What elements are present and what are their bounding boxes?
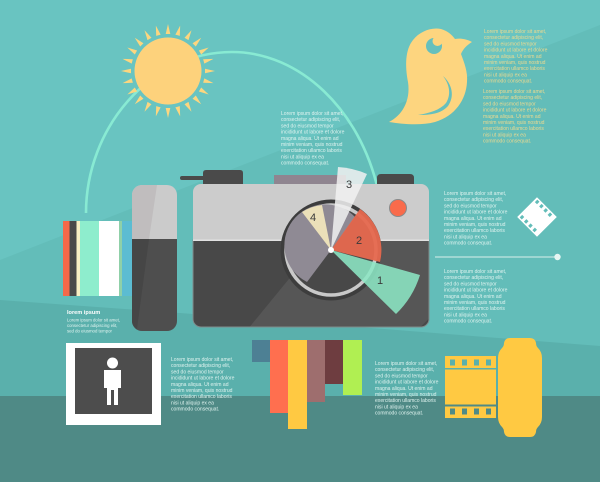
text block: right lower: minim veniam, quis nostrud [444,300,506,306]
text block: photo caption: sed do eiusmod tempor [171,369,224,375]
text block: stripes caption: Lorem ipsum dolor sit amet, [67,318,120,322]
lens cylinder [132,185,177,331]
text block: center top: sed do eiusmod tempor [281,123,334,129]
text block: bird upper: commodo consequat. [484,79,532,85]
text block: bird upper: nisi ut aliquip ex ea [484,72,527,78]
text block: right upper: minim veniam, quis nostrud [444,222,506,228]
text block: photo caption: commodo consequat. [171,407,219,413]
text block: center top: minim veniam, quis nostrud [281,142,343,148]
icon: bird [389,28,472,124]
text block: right lower: Lorem ipsum dolor sit amet, [444,269,506,275]
right knob [377,174,414,184]
wedge 3 [331,167,367,250]
camera body [193,184,429,327]
text block: film caption: exercitation ullamco laboris [375,398,436,404]
text block: bird lower: exercitation ullamco laboris [483,126,544,132]
text block: right upper: sed do eiusmod tempor [444,203,497,209]
shutter button [390,200,406,216]
text block: bird lower: commodo consequat. [483,139,531,145]
text block: center top: exercitation ullamco laboris [281,148,342,154]
text block: right upper: nisi ut aliquip ex ea [444,234,487,240]
shutter knob [180,170,243,184]
text block: photo caption: consectetur adipiscing elit, [171,363,230,369]
text block: film caption: Lorem ipsum dolor sit amet, [375,361,437,367]
text block: center top: magna aliqua. Ut enim ad [281,136,339,142]
heading: lorem ipsum: lorem ipsum [67,310,100,316]
wedge 1: 1 [377,275,383,287]
text block: film caption: consectetur adipiscing elit, [375,367,434,373]
text block: right upper: consectetur adipiscing elit, [444,197,503,203]
lens centre [328,247,334,253]
text block: photo caption: exercitation ullamco laboris [171,394,232,400]
text block: center top: consectetur adipiscing elit, [281,117,340,123]
text block: film caption: magna aliqua. Ut enim ad [375,386,433,392]
wedge 4 [302,205,331,250]
text block: center top: nisi ut aliquip ex ea [281,154,324,160]
text block: bird lower: sed do eiusmod tempor [483,101,536,107]
text block: right upper: Lorem ipsum dolor sit amet, [444,191,506,197]
lens [280,200,382,300]
viewfinder hump [274,175,346,184]
text block: photo caption: Lorem ipsum dolor sit amet, [171,357,233,363]
text block: bird lower: incididunt ut labore et dolore [483,108,547,114]
text block: right lower: exercitation ullamco laboris [444,306,505,312]
text block: photo caption: incididunt ut labore et dolore [171,376,235,382]
text block: bird upper: magna aliqua. Ut enim ad [484,54,542,60]
photo frame [66,343,161,425]
text block: center top: commodo consequat. [281,161,329,167]
icon: film roll [445,338,542,437]
colour stripes [63,221,132,296]
text block: photo caption: nisi ut aliquip ex ea [171,400,214,406]
bar chart [252,340,362,429]
text block: bird lower: consectetur adipiscing elit, [483,95,542,101]
text block: photo caption: minim veniam, quis nostrud [171,388,233,394]
text block: bird upper: incididunt ut labore et dolore [484,48,548,54]
text block: right upper: exercitation ullamco laboris [444,228,505,234]
text block: film caption: nisi ut aliquip ex ea [375,404,418,410]
text block: bird lower: magna aliqua. Ut enim ad [483,114,541,120]
text block: center top: Lorem ipsum dolor sit amet, [281,111,343,117]
wedge 2 [331,209,381,262]
wedge 3: 3 [346,179,352,191]
text block: bird upper: exercitation ullamco laboris [484,66,545,72]
wedge 4: 4 [310,212,316,224]
arc line [86,52,378,213]
text block: right lower: consectetur adipiscing elit, [444,275,503,281]
text block: film caption: minim veniam, quis nostrud [375,392,437,398]
text block: right lower: sed do eiusmod tempor [444,281,497,287]
text block: bird lower: minim veniam, quis nostrud [483,120,545,126]
camera [180,167,429,327]
text block: bird upper: consectetur adipiscing elit, [484,35,543,41]
text block: right lower: commodo consequat. [444,319,492,325]
text block: right upper: commodo consequat. [444,241,492,247]
text block: bird lower: Lorem ipsum dolor sit amet, [483,89,545,95]
icon: sun [121,24,215,118]
text block: right lower: magna aliqua. Ut enim ad [444,294,502,300]
text block: center top: incididunt ut labore et dolore [281,130,345,136]
wedge 2: 2 [356,235,362,247]
text block: stripes caption: consectetur adipiscing elit, [67,323,117,328]
text block: bird upper: Lorem ipsum dolor sit amet, [484,29,546,35]
text block: film caption: incididunt ut labore et dolore [375,380,439,386]
text block: photo caption: magna aliqua. Ut enim ad [171,382,229,388]
text block: right lower: nisi ut aliquip ex ea [444,312,487,318]
text block: right upper: incididunt ut labore et dolore [444,210,508,216]
grey sector [284,204,355,282]
text block: film caption: sed do eiusmod tempor [375,373,428,379]
icon: film frame [517,197,557,237]
text block: bird lower: nisi ut aliquip ex ea [483,132,526,138]
text block: film caption: commodo consequat. [375,411,423,417]
text block: right upper: magna aliqua. Ut enim ad [444,216,502,222]
text block: stripes caption: sed do eiusmod tempor [67,328,112,333]
pointer line [435,254,561,260]
wedge 1 [331,250,420,314]
icon: person [104,358,121,405]
text block: right lower: incididunt ut labore et dolore [444,288,508,294]
text block: bird upper: minim veniam, quis nostrud [484,60,546,66]
text block: bird upper: sed do eiusmod tempor [484,41,537,47]
